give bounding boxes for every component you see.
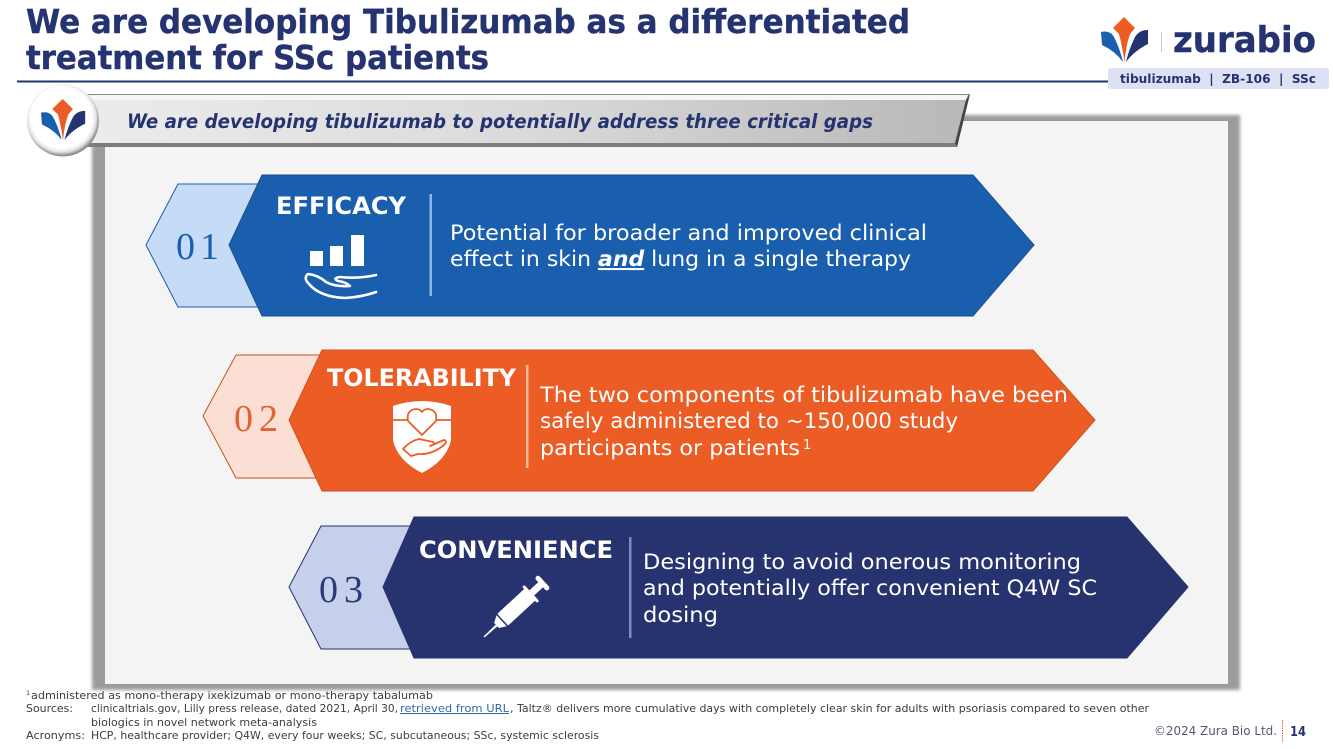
copyright and page number: 14 <box>1290 725 1306 740</box>
title: treatment for SSc patients <box>26 38 489 77</box>
number tab 01: 01 <box>176 226 219 268</box>
text: efficacy description: Potential for broader and improved clinical <box>450 221 927 245</box>
text: efficacy description: effect in skin and lung in a single therapy <box>450 247 911 271</box>
copyright and page number <box>1154 720 1306 742</box>
number tab 01 <box>146 184 275 307</box>
footnotes <box>26 689 1150 742</box>
banner <box>84 94 970 147</box>
text: convenience description: Designing to avoid onerous monitoring <box>643 550 1081 574</box>
tag: product label <box>1108 68 1329 89</box>
tag: product label: tibulizumab | ZB-106 | SSc <box>1120 72 1316 86</box>
text: tolerability description: 1 <box>803 438 811 453</box>
footnotes: biologics in novel network meta-analysis <box>91 717 317 729</box>
panel: tolerability <box>203 350 1095 491</box>
icon: syringe <box>477 573 552 645</box>
logo: zurabio <box>1101 17 1316 62</box>
footnotes: retrieved from URL <box>400 703 509 715</box>
panel: convenience <box>289 517 1188 658</box>
text: convenience description: and potentially offer convenient Q4W SC <box>643 576 1097 600</box>
panel: three gaps <box>92 115 1240 690</box>
copyright and page number: ©2024 Zura Bio Ltd. <box>1154 724 1277 738</box>
text: convenience description: dosing <box>643 603 718 627</box>
icon: logo badge <box>27 84 99 156</box>
banner: We are developing tibulizumab to potentially address three critical gaps <box>127 110 873 133</box>
footnotes: administered as mono-therapy ixekizumab or mono-therapy tabalumab <box>31 690 433 702</box>
number tab 03 <box>289 526 425 649</box>
footnotes: clinicaltrials.gov, Lilly press release, dated 2021, April 30, <box>91 703 398 715</box>
heading: convenience: CONVENIENCE <box>419 536 613 564</box>
panel: efficacy <box>146 175 1034 316</box>
heading: efficacy: EFFICACY <box>276 192 407 220</box>
icon: shield with heart and hand <box>393 401 451 473</box>
title: We are developing Tibulizumab as a differentiated <box>26 2 910 41</box>
footnotes: HCP, healthcare provider; Q4W, every four weeks; SC, subcutaneous; SSc, systemic sclerosis <box>91 730 599 742</box>
number tab 02 <box>203 355 335 478</box>
text: convenience description <box>643 550 1097 627</box>
text: tolerability description: safely administered to ~150,000 study <box>540 409 958 433</box>
text: efficacy description <box>450 221 927 271</box>
icon: chart on hand <box>306 235 376 298</box>
text: tolerability description: participants or patients <box>540 436 800 460</box>
footnotes: , Taltz® delivers more cumulative days with completely clear skin for adults with psoriasis compared to seven other <box>510 703 1150 715</box>
heading: tolerability: TOLERABILITY <box>327 364 517 392</box>
efficacy arrow <box>229 175 1034 316</box>
number tab 03: 03 <box>319 569 363 611</box>
convenience arrow <box>383 517 1188 658</box>
footnotes: 1 <box>26 689 30 697</box>
text: tolerability description: The two components of tibulizumab have been <box>539 383 1068 407</box>
tolerability arrow <box>289 350 1095 491</box>
footnotes: Sources: <box>26 703 73 715</box>
title <box>26 2 910 77</box>
footnotes: Acronyms: <box>26 730 85 742</box>
text: tolerability description <box>539 383 1068 460</box>
number tab 02: 02 <box>234 398 278 440</box>
logo: zurabio: zurabio <box>1173 20 1316 61</box>
